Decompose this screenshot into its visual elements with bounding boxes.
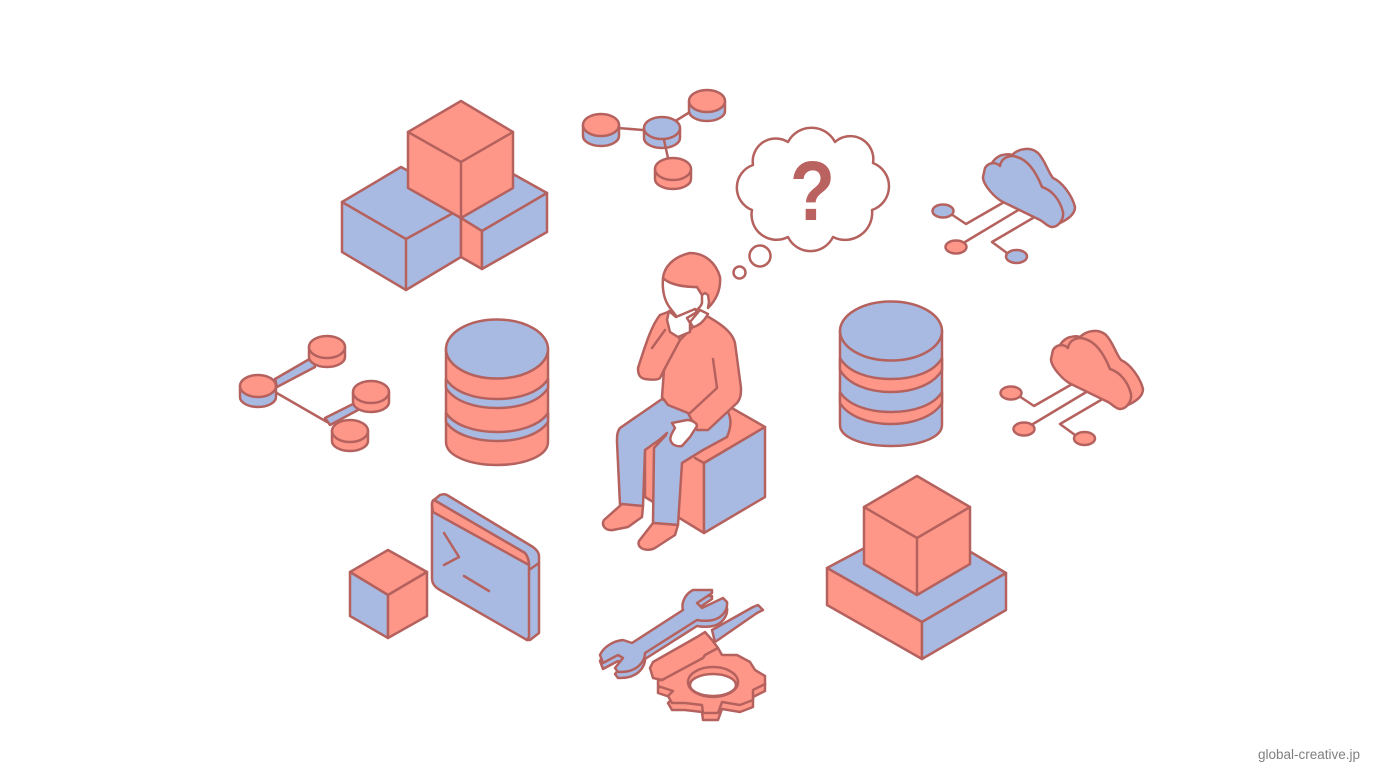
- icon: network nodes left: [240, 336, 389, 451]
- hand on knee: [670, 420, 697, 446]
- hand at chin: [667, 309, 697, 337]
- legs: [617, 399, 731, 525]
- gear: [658, 655, 765, 720]
- thought bubble with question mark: [737, 128, 889, 251]
- icon: database left: [446, 320, 548, 465]
- torso and arms: [638, 312, 741, 430]
- collar: [690, 310, 708, 327]
- block seat: [645, 407, 765, 533]
- screwdriver shaft: [712, 605, 763, 642]
- icon: database right: [840, 302, 942, 446]
- icon: network nodes top: [583, 90, 725, 189]
- question mark: ?: [790, 144, 835, 238]
- icon: large cube on platform: [827, 476, 1006, 659]
- icon: terminal window: [432, 494, 539, 640]
- wrench: [600, 596, 727, 678]
- icon: coral cloud with connectors: [1000, 331, 1143, 445]
- icon: wrench, screwdriver and gear: [600, 590, 765, 720]
- icon: stacked cubes top left: [342, 101, 547, 290]
- shoes: [603, 504, 643, 530]
- thought dots: [734, 246, 770, 278]
- person seated on block: [603, 253, 765, 550]
- watermark: global-creative.jp: [1258, 747, 1360, 762]
- icon: blue cloud with connectors: [932, 149, 1075, 263]
- hair: [663, 253, 720, 308]
- screwdriver handle: [650, 632, 718, 680]
- face: [663, 278, 702, 317]
- icon: small cube bottom left: [350, 550, 427, 638]
